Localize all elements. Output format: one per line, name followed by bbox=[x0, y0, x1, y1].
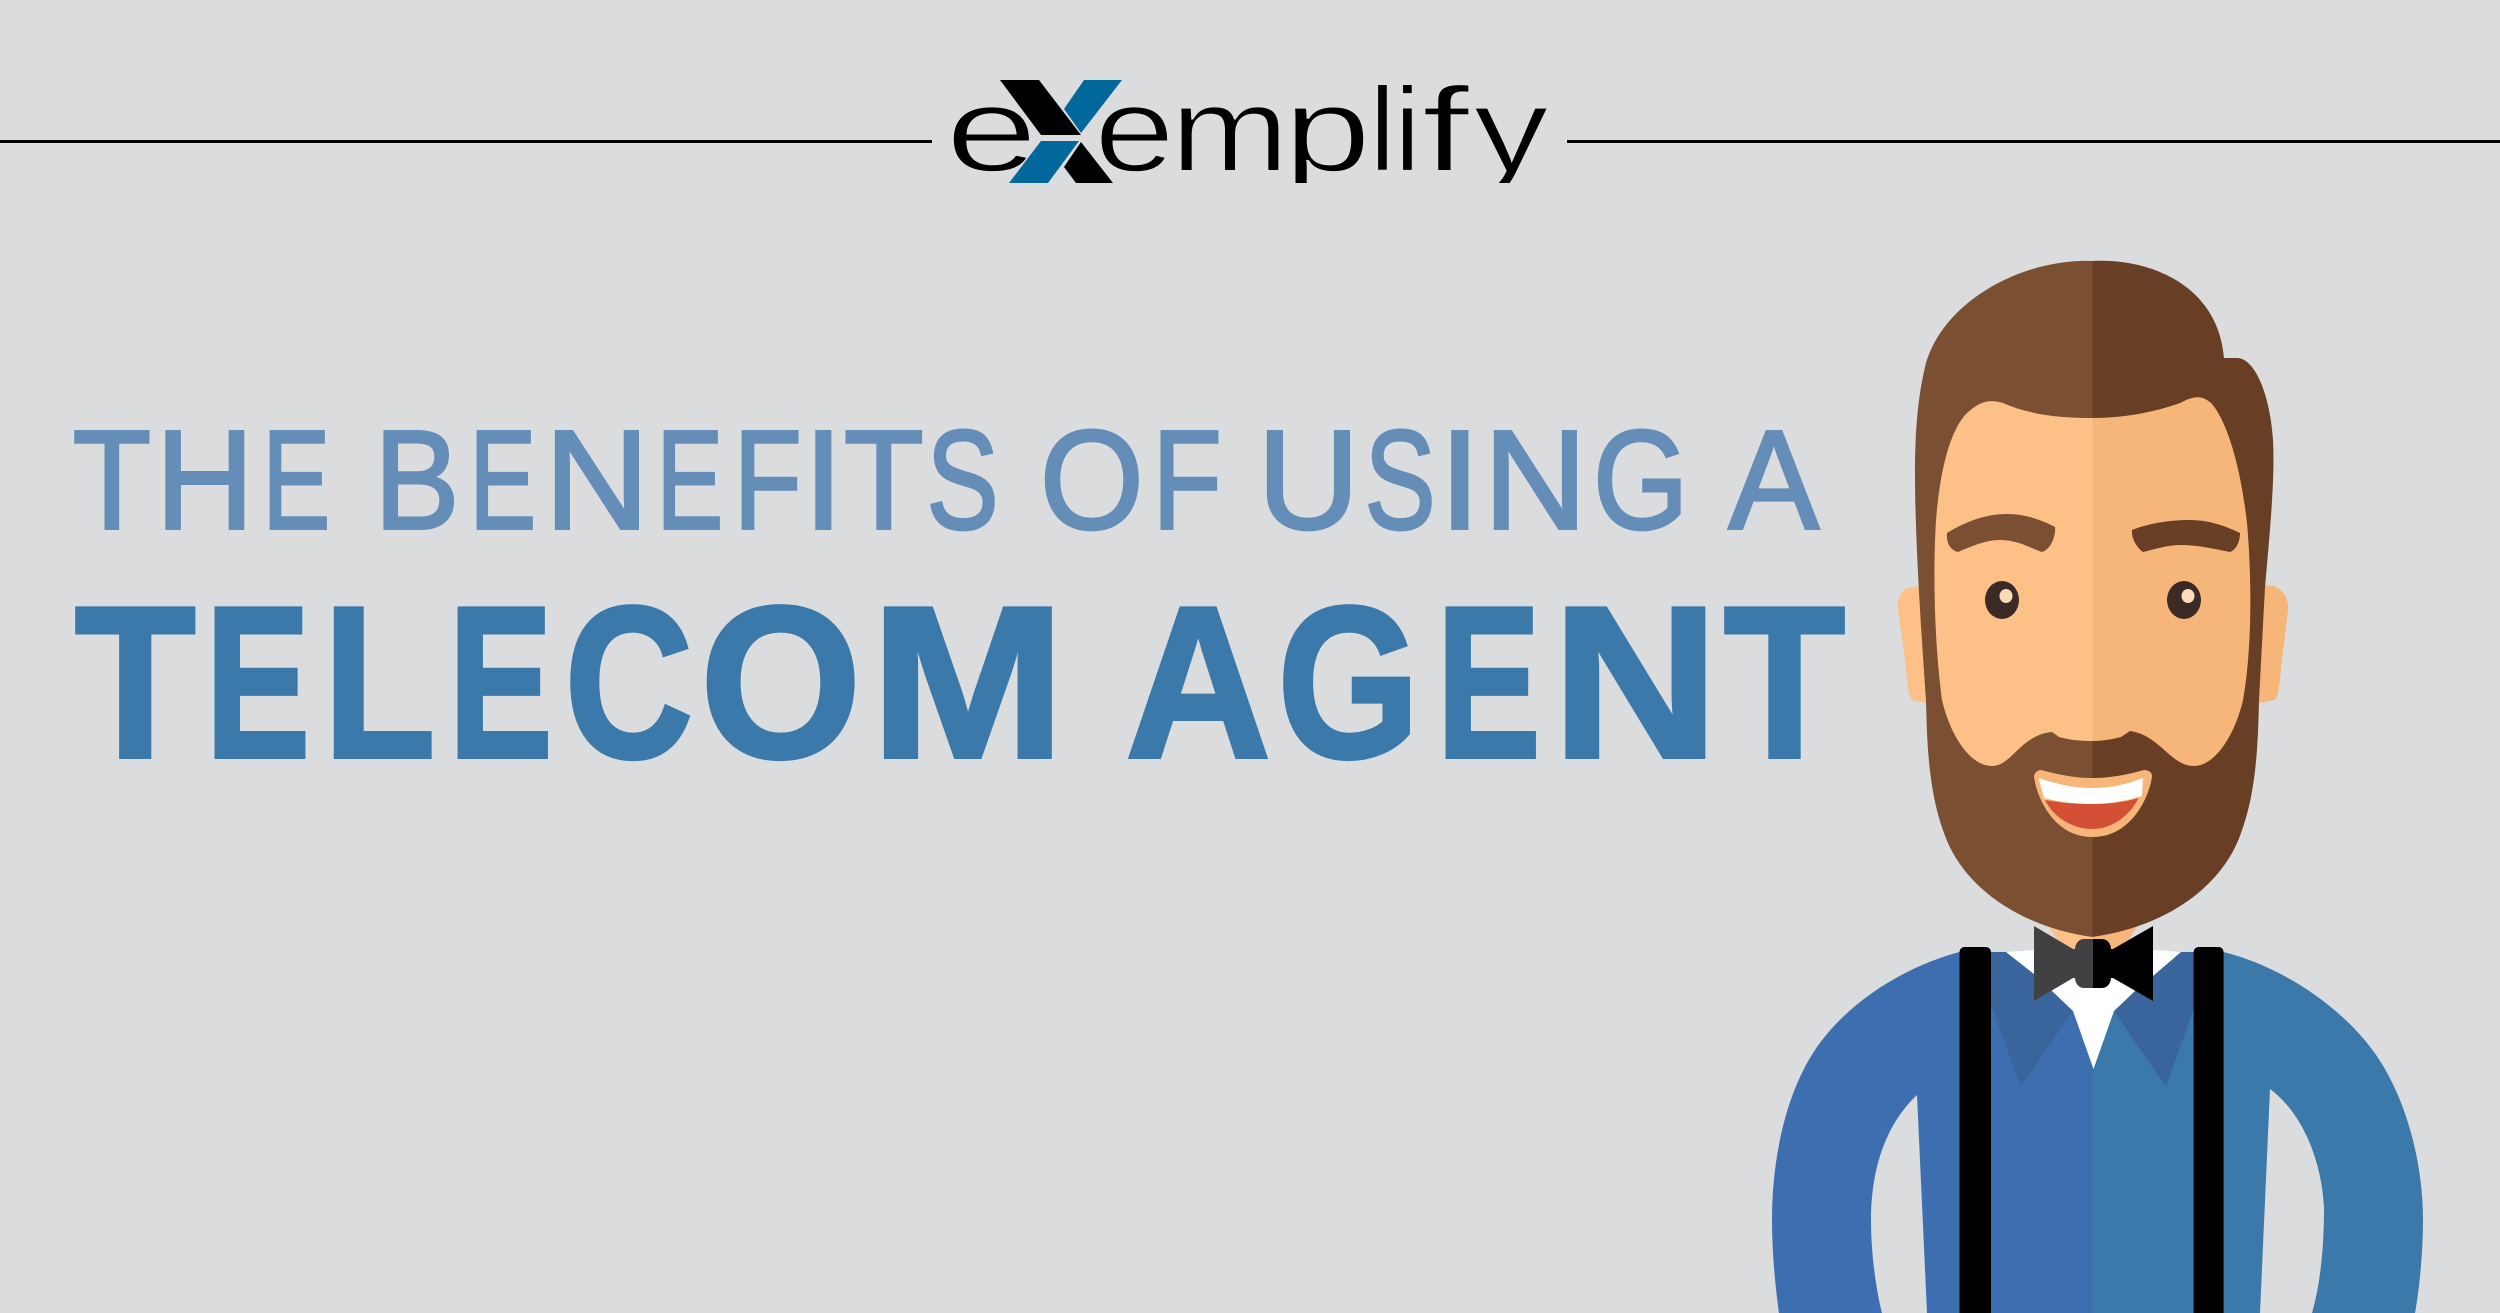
title line 1: U bbox=[1258, 400, 1359, 558]
hair and beard bbox=[1915, 261, 2273, 937]
face bbox=[1934, 397, 2250, 766]
title line 2: E bbox=[1437, 561, 1541, 803]
eye left bbox=[1985, 581, 2019, 619]
character: bearded man bbox=[1772, 261, 2423, 1313]
eyebrow left bbox=[1947, 514, 2055, 552]
title line 1: T bbox=[844, 400, 924, 558]
logo wordmark: f bbox=[1422, 63, 1470, 197]
mouth bbox=[2034, 770, 2152, 837]
eyebrow right bbox=[2132, 520, 2240, 552]
title line 1: E bbox=[262, 400, 330, 558]
title line 2: N bbox=[1552, 561, 1719, 803]
title line 2: C bbox=[565, 561, 693, 803]
title line 2: A bbox=[1126, 561, 1271, 803]
title line 1: G bbox=[1593, 400, 1688, 558]
title line 2: G bbox=[1277, 561, 1420, 803]
title line 1 bbox=[73, 400, 1819, 558]
title line 1: E bbox=[656, 400, 723, 558]
logo wordmark: y bbox=[1474, 63, 1549, 197]
title line 1: E bbox=[470, 400, 536, 558]
logo wordmark: l bbox=[1369, 63, 1396, 197]
title line 1: I bbox=[1439, 400, 1481, 558]
eye right bbox=[2167, 581, 2201, 619]
logo wordmark bbox=[954, 85, 1546, 183]
title line 1: B bbox=[374, 400, 460, 558]
title line 2: M bbox=[870, 561, 1065, 803]
title line 2: E bbox=[206, 561, 310, 803]
title line 1: F bbox=[734, 400, 802, 558]
title line 1: N bbox=[1484, 400, 1587, 558]
title line 1: S bbox=[1365, 400, 1436, 558]
title line 2: T bbox=[1724, 561, 1845, 803]
title line 2: O bbox=[700, 561, 861, 803]
logo wordmark: p bbox=[1284, 63, 1371, 197]
logo X mark bbox=[1000, 80, 1122, 183]
title line 1: A bbox=[1728, 400, 1819, 558]
title line 1: O bbox=[1040, 400, 1144, 558]
shirt bbox=[1772, 952, 2423, 1313]
ears bbox=[1898, 585, 2288, 704]
bow tie bbox=[2034, 926, 2153, 1001]
logo wordmark: i bbox=[1394, 63, 1421, 197]
title line 1: S bbox=[927, 400, 999, 558]
title line 2: E bbox=[449, 561, 553, 803]
title line 1: I bbox=[804, 400, 843, 558]
logo: eXemplify bbox=[954, 80, 1546, 183]
title line 2: L bbox=[323, 561, 436, 803]
title line 1: N bbox=[544, 400, 649, 558]
title line 1: F bbox=[1152, 400, 1222, 558]
logo wordmark: e bbox=[945, 63, 1038, 197]
title line 2 bbox=[75, 561, 1845, 803]
title line 1: H bbox=[156, 400, 254, 558]
neck bbox=[2048, 925, 2138, 960]
collar shadow bbox=[1991, 952, 2194, 1087]
title line 1: T bbox=[73, 400, 151, 558]
title line 2: T bbox=[75, 561, 196, 803]
suspenders bbox=[1960, 947, 2224, 1313]
logo wordmark: e bbox=[1094, 63, 1175, 197]
logo wordmark: m bbox=[1171, 63, 1289, 197]
white shirt collar bbox=[2006, 950, 2181, 1069]
